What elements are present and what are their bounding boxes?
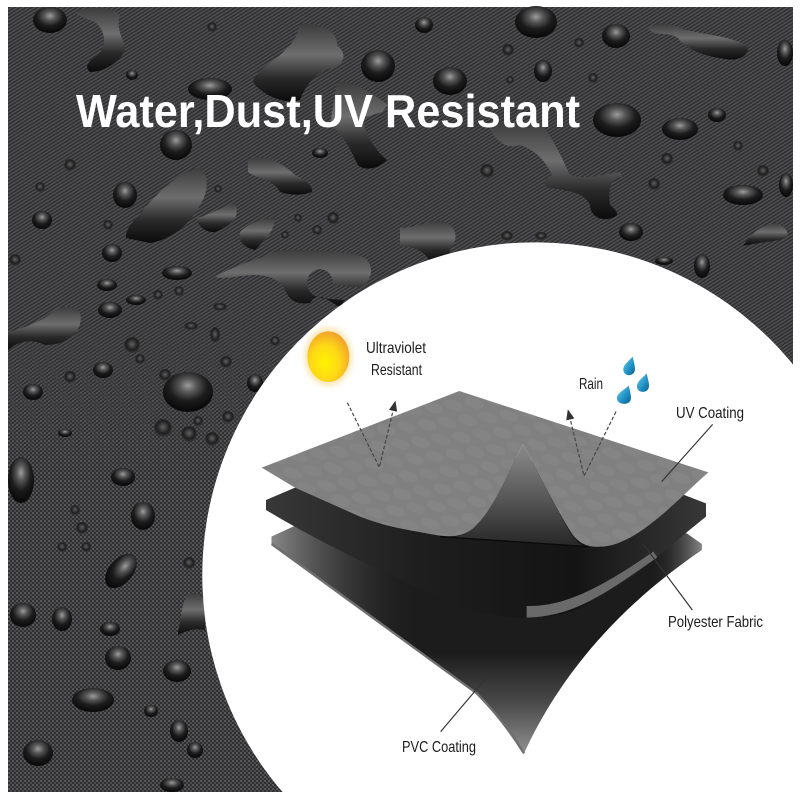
right page margin	[793, 0, 800, 800]
arrow: ultraviolet reflected	[347, 403, 395, 467]
label: Ultraviolet Resistant: Ultraviolet	[366, 340, 426, 357]
leader line: PVC coating	[441, 673, 490, 732]
icon: rain drops	[617, 357, 649, 404]
title: Water,Dust,UV Resistant	[76, 85, 580, 137]
leader line: UV coating	[662, 424, 713, 482]
peeled corner underside	[453, 444, 585, 547]
layer: polyester fabric	[266, 453, 706, 618]
icon: sun	[304, 327, 353, 387]
panel: white circle	[202, 242, 800, 800]
bottom page margin	[0, 792, 800, 800]
leader line: polyester fabric	[643, 543, 692, 610]
label: Ultraviolet Resistant	[366, 340, 426, 379]
layer: UV coating sheet	[262, 391, 708, 547]
label: PVC Coating: PVC Coating	[402, 739, 476, 756]
label: Rain: Rain	[579, 376, 603, 393]
label: Polyester Fabric: Polyester Fabric	[668, 614, 763, 631]
layered fabric diagram	[262, 327, 713, 753]
label: UV Coating: UV Coating	[676, 405, 744, 422]
label: Ultraviolet Resistant: Resistant	[371, 362, 422, 379]
layer: PVC coating	[272, 520, 702, 753]
fabric gap inside splash	[307, 269, 333, 297]
arrow: rain repelled	[568, 411, 616, 476]
